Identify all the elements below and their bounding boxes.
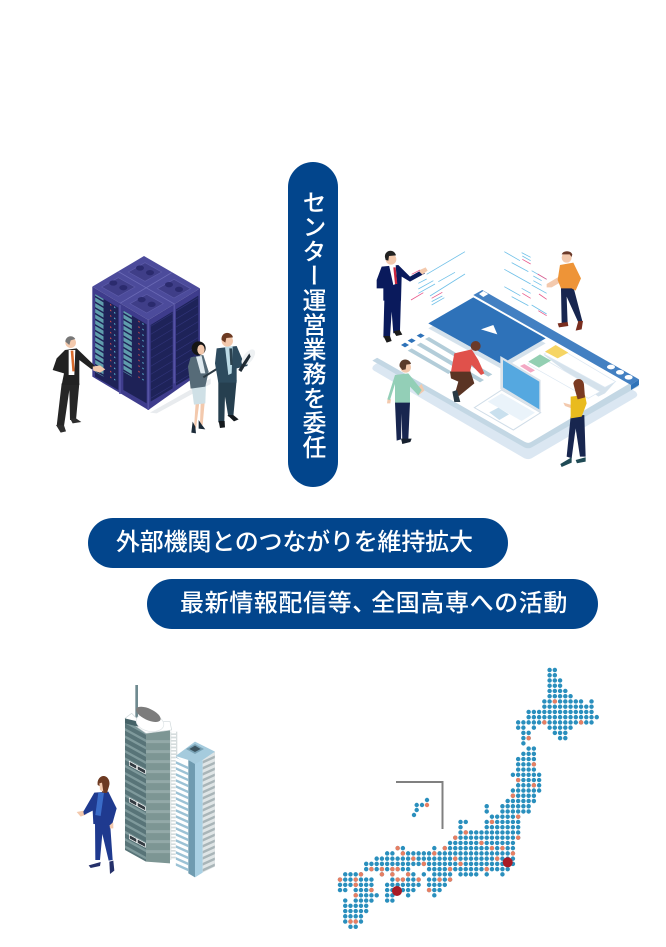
man in black suit	[53, 336, 105, 433]
map dots: orange highlights	[340, 701, 581, 922]
woman in blue suit	[77, 776, 117, 874]
laptop	[474, 356, 541, 430]
tall grey tower	[125, 704, 177, 863]
illustration: server racks with three business people	[53, 256, 258, 433]
woman in yellow shirt	[560, 379, 587, 467]
floating code lines	[411, 252, 547, 316]
vertical label pill	[288, 162, 338, 487]
location marker east	[503, 857, 513, 867]
illustration: isometric web dashboard with five people	[372, 251, 639, 467]
label pill: external connections: 外部機関とのつながりを維持拡大	[116, 529, 473, 556]
woman in grey jacket	[188, 341, 217, 433]
man in orange sweater	[547, 251, 583, 331]
vertical label pill: センター運営業務を委任	[298, 190, 325, 459]
illustration: office towers and business woman	[77, 685, 215, 877]
label pill: external connections	[88, 518, 508, 568]
man in navy suit	[377, 251, 428, 343]
antenna	[135, 685, 138, 722]
man with tablet	[215, 333, 258, 428]
islands inset frame	[396, 782, 442, 829]
video panel with play button	[428, 297, 546, 369]
light blue tower	[176, 742, 215, 877]
man in green shirt	[387, 359, 424, 444]
dashboard plate	[372, 290, 639, 459]
Ogasawara/Okinawa islands	[412, 798, 429, 817]
location marker west	[392, 886, 402, 896]
list items and cards	[401, 333, 616, 398]
map of Japan in dots	[340, 670, 597, 927]
man in red shirt crouching	[450, 341, 484, 402]
map dots: blue	[340, 670, 597, 927]
floor shadow	[150, 378, 211, 413]
label pill: nationwide activities	[147, 579, 598, 629]
server rack block	[92, 256, 200, 410]
label pill: nationwide activities: 最新情報配信等、全国高専への活動	[180, 590, 568, 617]
